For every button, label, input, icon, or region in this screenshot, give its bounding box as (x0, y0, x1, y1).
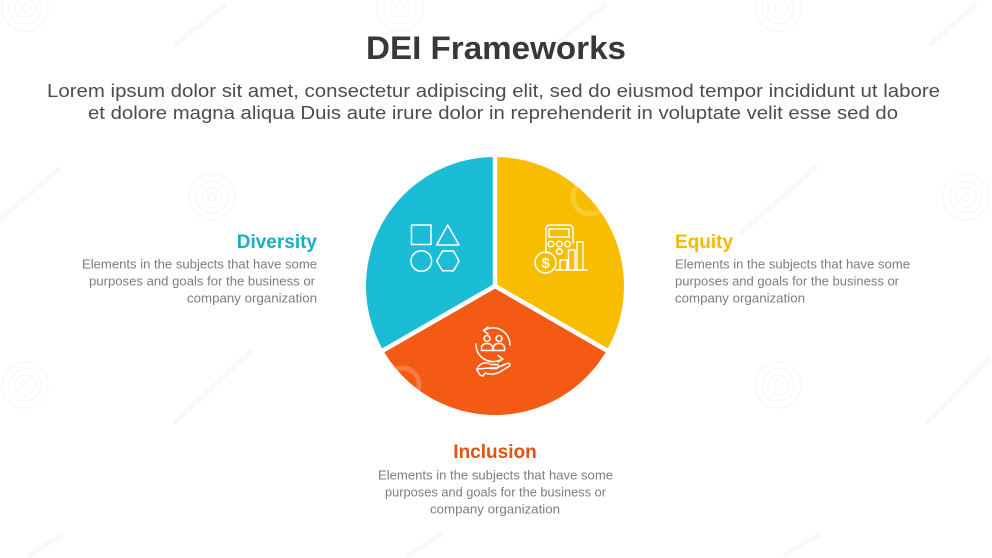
label: equity: Equity (675, 232, 733, 253)
label: inclusion: Elements in the subjects that have some (378, 468, 613, 482)
pie chart (366, 150, 624, 415)
subtitle text (47, 81, 940, 123)
label: inclusion: Inclusion (453, 442, 537, 463)
label: equity: purposes and goals for the business or (675, 274, 900, 288)
label: inclusion (378, 442, 613, 516)
icon: calculator with coins and bars (535, 225, 587, 273)
label: diversity: company organization (187, 290, 317, 306)
segment: inclusion (383, 286, 607, 415)
icon: people in cycle above a hand (476, 327, 510, 376)
label: equity: company organization (675, 290, 805, 306)
subtitle text: Lorem ipsum dolor sit amet, consectetur adipiscing elit, sed do eiusmod tempor incididunt ut labore (47, 81, 940, 101)
segment: equity (495, 157, 624, 350)
icon: calculator with coins and bars: $ (541, 255, 550, 272)
label: diversity: Elements in the subjects that have some (82, 256, 317, 272)
label: inclusion: company organization (430, 502, 560, 516)
label: diversity: purposes and goals for the business or (89, 274, 316, 288)
title: DEI Frameworks (366, 30, 626, 66)
icon: shapes (411, 225, 459, 271)
label: inclusion: purposes and goals for the business or (385, 484, 607, 500)
segment: diversity (366, 157, 495, 350)
label: equity: Elements in the subjects that have some (675, 256, 910, 272)
label: diversity (82, 232, 317, 306)
label: diversity: Diversity (237, 232, 317, 253)
label: equity (675, 232, 910, 306)
subtitle text: et dolore magna aliqua Duis aute irure dolor in reprehenderit in voluptate velit esse sed do (88, 103, 898, 123)
